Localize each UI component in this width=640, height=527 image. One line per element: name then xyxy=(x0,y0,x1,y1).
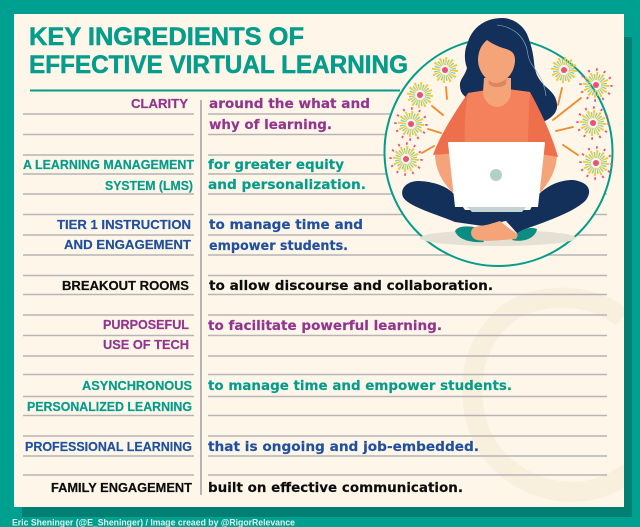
row: learning management system: and personalization. xyxy=(208,178,366,193)
row: family engagement xyxy=(51,480,463,496)
row: professional learning: PROFESSIONAL LEARNING xyxy=(25,439,192,454)
hair highlight xyxy=(497,25,546,96)
coffee ring stain xyxy=(472,298,630,492)
neck shadow xyxy=(488,78,507,87)
column divider xyxy=(200,100,202,495)
row: tier 1 instruction: TIER 1 INSTRUCTION xyxy=(57,217,191,232)
row: clarity xyxy=(131,96,370,133)
row: tier 1 instruction: empower students. xyxy=(209,239,348,254)
row: purposeful use of tech: PURPOSEFUL xyxy=(103,317,189,332)
row: tier 1 instruction: AND ENGAGEMENT xyxy=(64,237,191,252)
notebook ruled lines: right column xyxy=(208,114,607,475)
row: purposeful use of tech: USE OF TECH xyxy=(103,337,189,352)
fireworks xyxy=(390,61,612,178)
row: clarity: CLARITY xyxy=(131,96,188,111)
row: clarity: why of learning. xyxy=(209,118,332,133)
shirt front xyxy=(465,88,530,145)
floor shadow xyxy=(420,230,576,246)
title: KEY INGREDIENTS OF xyxy=(29,23,304,51)
row: tier 1 instruction xyxy=(57,217,363,254)
illustration: woman with laptop xyxy=(384,18,612,266)
row: professional learning xyxy=(25,439,479,455)
title xyxy=(29,23,408,79)
face xyxy=(478,40,515,83)
row: asynchronous personalized learning: to manage time and empower students. xyxy=(208,379,512,394)
row: tier 1 instruction: to manage time and xyxy=(209,218,363,233)
row: clarity: around the what and xyxy=(209,97,370,112)
row: breakout rooms: BREAKOUT ROOMS xyxy=(62,278,189,293)
row: family engagement: FAMILY ENGAGEMENT xyxy=(51,480,192,495)
row: purposeful use of tech xyxy=(103,317,442,352)
row: asynchronous personalized learning: PERSONALIZED LEARNING xyxy=(27,399,192,414)
row: learning management system: SYSTEM (LMS) xyxy=(105,178,193,193)
row: asynchronous personalized learning: ASYNCHRONOUS xyxy=(82,378,192,393)
feet xyxy=(471,221,518,241)
row: learning management system xyxy=(23,157,366,193)
row: purposeful use of tech: to facilitate powerful learning. xyxy=(208,319,442,334)
teal shoes xyxy=(455,226,537,242)
title: EFFECTIVE VIRTUAL LEARNING xyxy=(29,51,408,79)
shirt sleeves xyxy=(433,88,558,157)
row: asynchronous personalized learning xyxy=(27,378,512,414)
row: learning management system: A LEARNING MANAGEMENT xyxy=(23,157,194,172)
crossed shin xyxy=(506,214,537,233)
laptop xyxy=(448,142,545,212)
title rule xyxy=(30,90,400,92)
arms xyxy=(435,150,557,192)
legs xyxy=(402,180,589,232)
row: breakout rooms xyxy=(62,278,493,294)
hair xyxy=(460,18,557,122)
laptop logo xyxy=(490,169,502,181)
row: professional learning: that is ongoing and job-embedded. xyxy=(208,440,479,455)
orange spark streaks xyxy=(422,87,581,155)
row: breakout rooms: to allow discourse and collaboration. xyxy=(209,279,493,294)
row: learning management system: for greater equity xyxy=(208,158,345,173)
neck xyxy=(483,78,511,107)
notebook ruled lines: left column xyxy=(23,114,194,475)
circle frame xyxy=(384,38,612,266)
row: family engagement: built on effective communication. xyxy=(208,481,463,496)
